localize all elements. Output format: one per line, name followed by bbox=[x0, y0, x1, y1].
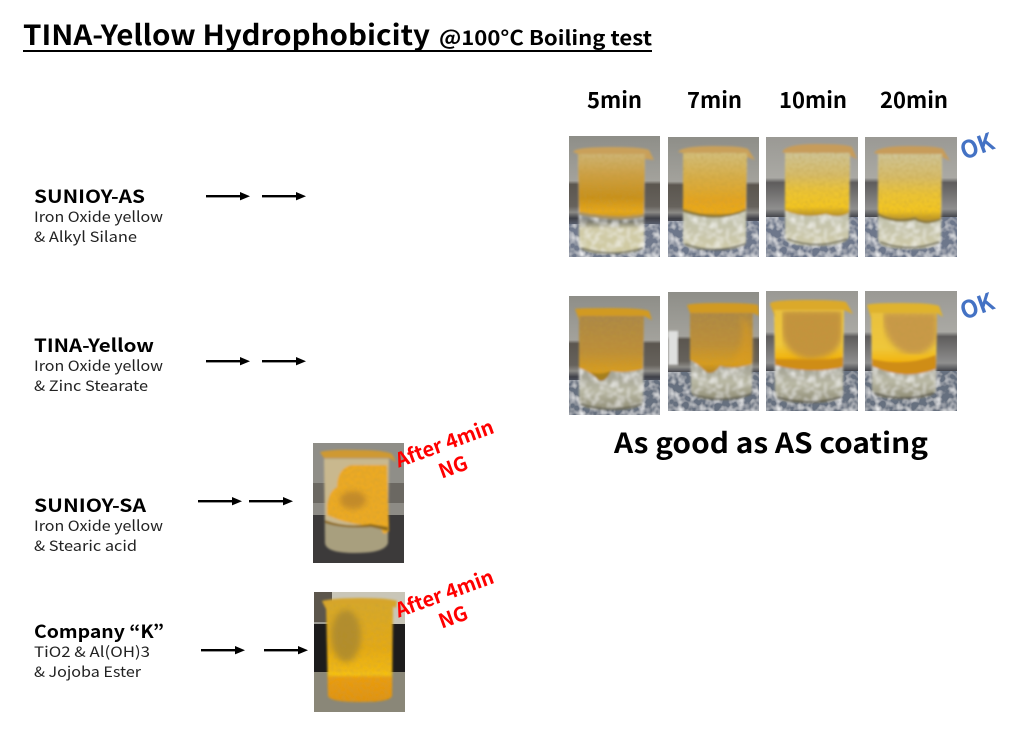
callout: SUNIOY-SA NG bbox=[390, 411, 506, 497]
callout: Company K NG: After 4min bbox=[390, 561, 497, 624]
column headers: time points bbox=[587, 83, 948, 115]
photo: SUNIOY-AS 5min bbox=[569, 136, 660, 257]
photo: SUNIOY-SA bbox=[313, 443, 404, 563]
label: SUNIOY-AS bbox=[34, 183, 163, 247]
photo: TINA-Yellow 7min bbox=[668, 292, 759, 411]
label: SUNIOY-AS: & Alkyl Silane bbox=[34, 226, 137, 247]
callout: OK row 1: OK bbox=[954, 122, 999, 167]
label: SUNIOY-AS: SUNIOY-AS bbox=[34, 183, 145, 209]
photo: SUNIOY-AS 20min bbox=[865, 137, 957, 257]
label: Company K: & Jojoba Ester bbox=[34, 661, 141, 682]
label: Company K: Company “K” bbox=[34, 618, 164, 644]
label: TINA-Yellow: TINA-Yellow bbox=[34, 332, 155, 358]
callout: Company K NG: NG bbox=[434, 597, 471, 634]
arrows: Company K bbox=[201, 646, 308, 654]
arrows: SUNIOY-SA bbox=[198, 497, 293, 505]
conclusion text: As good as AS coating bbox=[613, 422, 928, 462]
label: SUNIOY-SA: SUNIOY-SA bbox=[34, 492, 147, 518]
title: TINA-Yellow Hydrophobicity bbox=[23, 14, 430, 54]
column headers: time points: 20min bbox=[880, 83, 948, 115]
label: TINA-Yellow: & Zinc Stearate bbox=[34, 375, 148, 396]
label: TINA-Yellow: Iron Oxide yellow bbox=[34, 355, 163, 376]
photo: SUNIOY-AS 10min bbox=[766, 137, 858, 257]
label: TINA-Yellow bbox=[34, 332, 163, 396]
title: @100°C Boiling test bbox=[439, 22, 653, 51]
arrows: SUNIOY-AS bbox=[206, 192, 306, 200]
label: SUNIOY-SA bbox=[34, 492, 163, 556]
photo: Company K bbox=[314, 592, 405, 712]
callout: OK row 2: OK bbox=[954, 282, 999, 327]
callout: SUNIOY-SA NG: NG bbox=[434, 447, 471, 484]
title bbox=[23, 14, 653, 54]
label: Company K bbox=[34, 618, 164, 682]
label: Company K: TiO2 & Al(OH)3 bbox=[34, 641, 150, 662]
callout: Company K NG bbox=[390, 561, 506, 647]
photo: TINA-Yellow 20min bbox=[865, 291, 957, 411]
callout: SUNIOY-SA NG: After 4min bbox=[390, 411, 497, 474]
column headers: time points: 7min bbox=[687, 83, 742, 115]
label: SUNIOY-AS: Iron Oxide yellow bbox=[34, 206, 163, 227]
photo: TINA-Yellow 5min bbox=[569, 296, 660, 415]
label: SUNIOY-SA: & Stearic acid bbox=[34, 535, 137, 556]
arrows: TINA-Yellow bbox=[206, 357, 306, 365]
photo: TINA-Yellow 10min bbox=[766, 291, 858, 411]
photo: SUNIOY-AS 7min bbox=[668, 137, 759, 257]
label: SUNIOY-SA: Iron Oxide yellow bbox=[34, 515, 163, 536]
column headers: time points: 5min bbox=[587, 83, 642, 115]
column headers: time points: 10min bbox=[779, 83, 847, 115]
